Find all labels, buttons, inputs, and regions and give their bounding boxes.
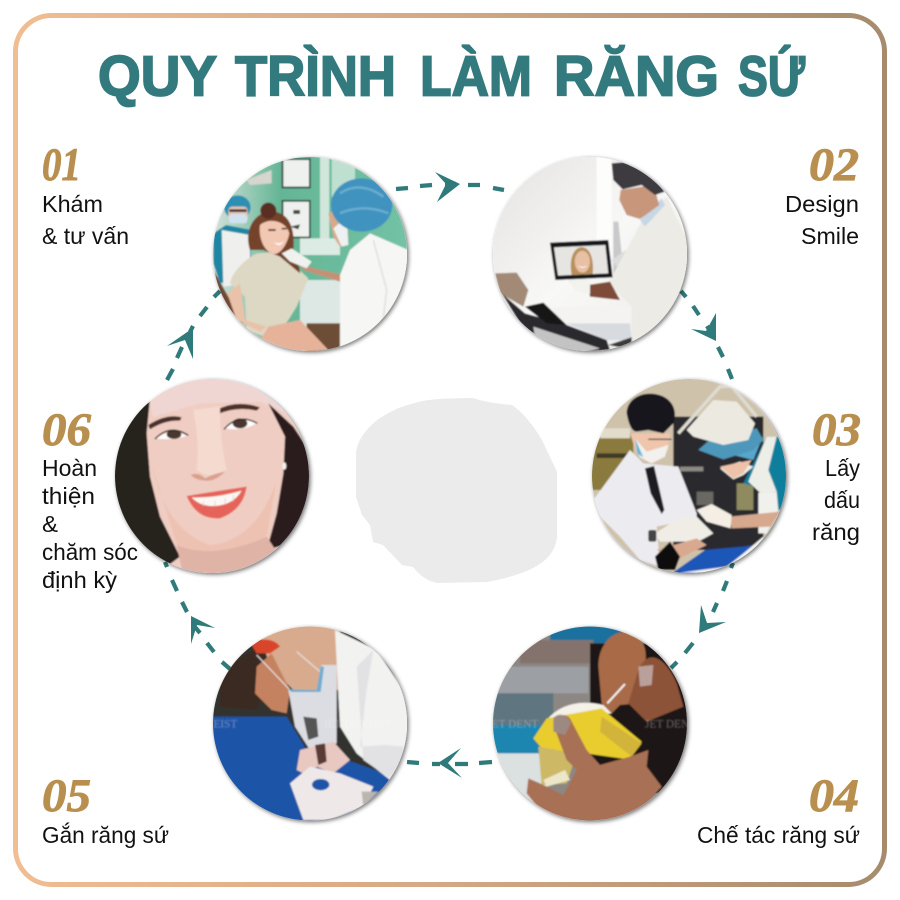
arrow: step 6 to step 1 — [167, 291, 220, 380]
step 01 label — [42, 139, 129, 249]
photo: step 6 smiling patient — [110, 375, 313, 578]
arrow: step 1 to step 2 — [396, 172, 504, 202]
step 04 label: Chế tác răng sứ — [697, 822, 860, 848]
title: SỨ — [738, 44, 806, 108]
arrow: step 3 to step 4 — [671, 563, 733, 668]
step 01 label: 01 — [42, 139, 81, 191]
title: QUY — [98, 44, 217, 108]
photo: step 4 crafting the teeth: JET DEN — [645, 718, 689, 730]
step 06 label: & — [42, 511, 58, 537]
photo: step 5 fitting the crowns: JET DENTIST — [323, 718, 391, 730]
title: LÀM — [420, 44, 532, 108]
step 06 label: chăm sóc — [42, 539, 138, 565]
photo: step 4 crafting the teeth: ET DENT — [492, 718, 538, 730]
step 01 label: & tư vấn — [42, 223, 129, 249]
step 06 label: thiện — [42, 483, 95, 509]
photo: step 4 crafting the teeth — [490, 623, 690, 823]
photo: step 2 design smile — [490, 153, 692, 357]
step 01 label: Khám — [42, 191, 103, 217]
step 03 label: Lấy — [825, 455, 860, 481]
title: RĂNG — [554, 44, 719, 108]
step 02 label: Design — [785, 191, 859, 217]
photo: step 5 fitting the crowns: EIST — [213, 718, 237, 730]
title: TRÌNH — [235, 44, 396, 108]
arrow: step 2 to step 3 — [681, 291, 732, 379]
photo: step 3 taking impressions — [590, 377, 793, 577]
step 03 label: 03 — [812, 404, 861, 456]
step 06 label: 06 — [42, 404, 92, 456]
step 02 label — [785, 139, 859, 249]
step 06 label: Hoàn — [42, 455, 97, 481]
step 02 label: Smile — [801, 223, 859, 249]
step 05 label: Gắn răng sứ — [42, 822, 169, 848]
step 04 label: 04 — [809, 770, 859, 822]
step 06 label: định kỳ — [42, 567, 118, 593]
title — [98, 44, 806, 108]
step 03 label: dấu — [824, 487, 860, 513]
step 05 label: 05 — [42, 770, 91, 822]
step 02 label: 02 — [809, 139, 859, 191]
photo: step 5 fitting the crowns — [210, 623, 413, 823]
step 05 label — [42, 770, 169, 848]
step 04 label — [697, 770, 860, 848]
arrow: step 5 to step 6 — [165, 562, 230, 669]
arrow: step 4 to step 5 — [407, 748, 492, 778]
photo: step 1 consultation — [210, 153, 410, 357]
step 06 label — [42, 404, 138, 593]
step 03 label: răng — [812, 519, 860, 545]
step 03 label — [812, 404, 861, 545]
center grey blob — [356, 398, 557, 583]
